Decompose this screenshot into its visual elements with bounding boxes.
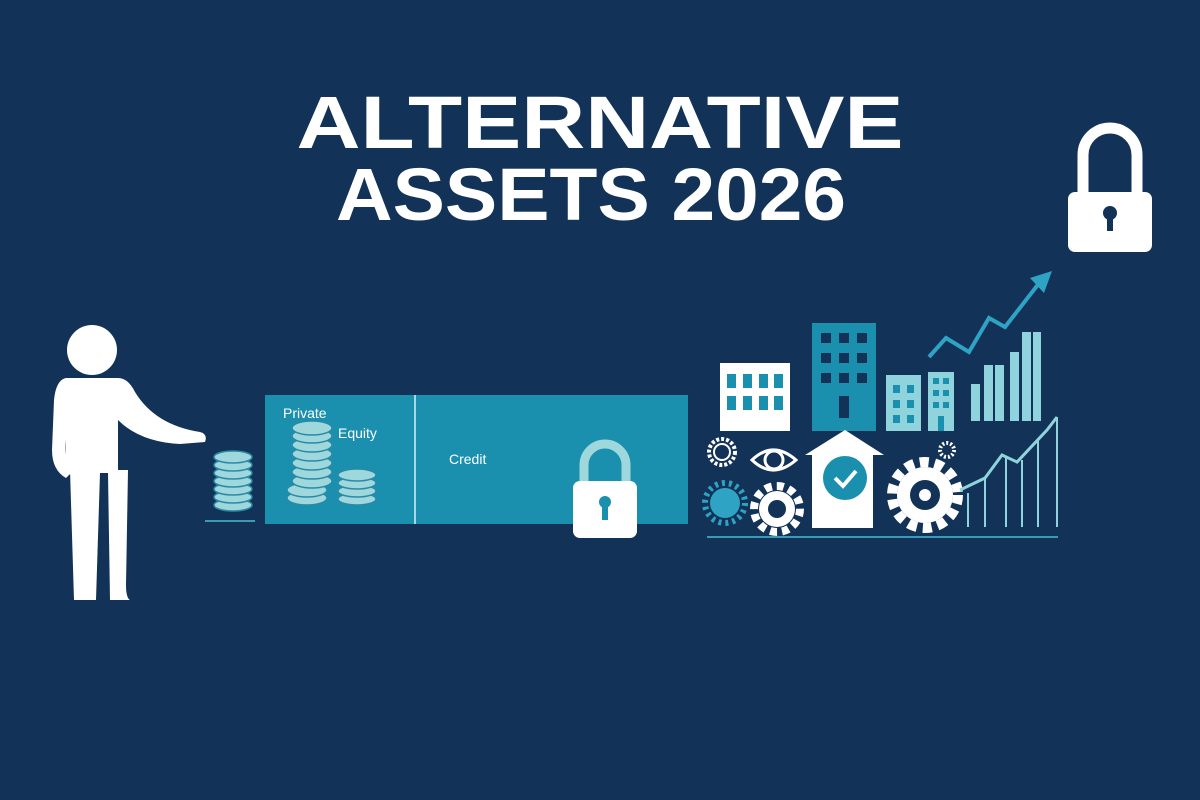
panel: asset classes	[265, 395, 688, 538]
icon: padlock in panel	[573, 444, 637, 538]
icon: padlock top right	[1068, 128, 1152, 252]
icon: teal tower	[812, 323, 876, 431]
title	[296, 81, 904, 236]
icon: coin stacks	[287, 421, 376, 505]
arrow: growth trend	[929, 271, 1052, 357]
line chart	[960, 417, 1057, 527]
icon: white building	[720, 363, 790, 431]
illustration: real assets and growth	[705, 271, 1058, 537]
icon: gears and eye	[705, 439, 958, 532]
icon: person figure	[52, 325, 206, 600]
title: ASSETS 2026	[336, 153, 846, 236]
icon: coin stack left	[205, 451, 255, 521]
label: Private Equity: Equity	[338, 425, 377, 441]
label: Credit: Credit	[449, 451, 486, 467]
bar chart	[971, 332, 1041, 421]
label: Private Equity	[283, 405, 377, 441]
icon: small buildings	[886, 372, 954, 431]
title: ALTERNATIVE	[296, 81, 904, 164]
icon: house with check	[805, 430, 884, 528]
label: Private Equity: Private	[283, 405, 327, 421]
